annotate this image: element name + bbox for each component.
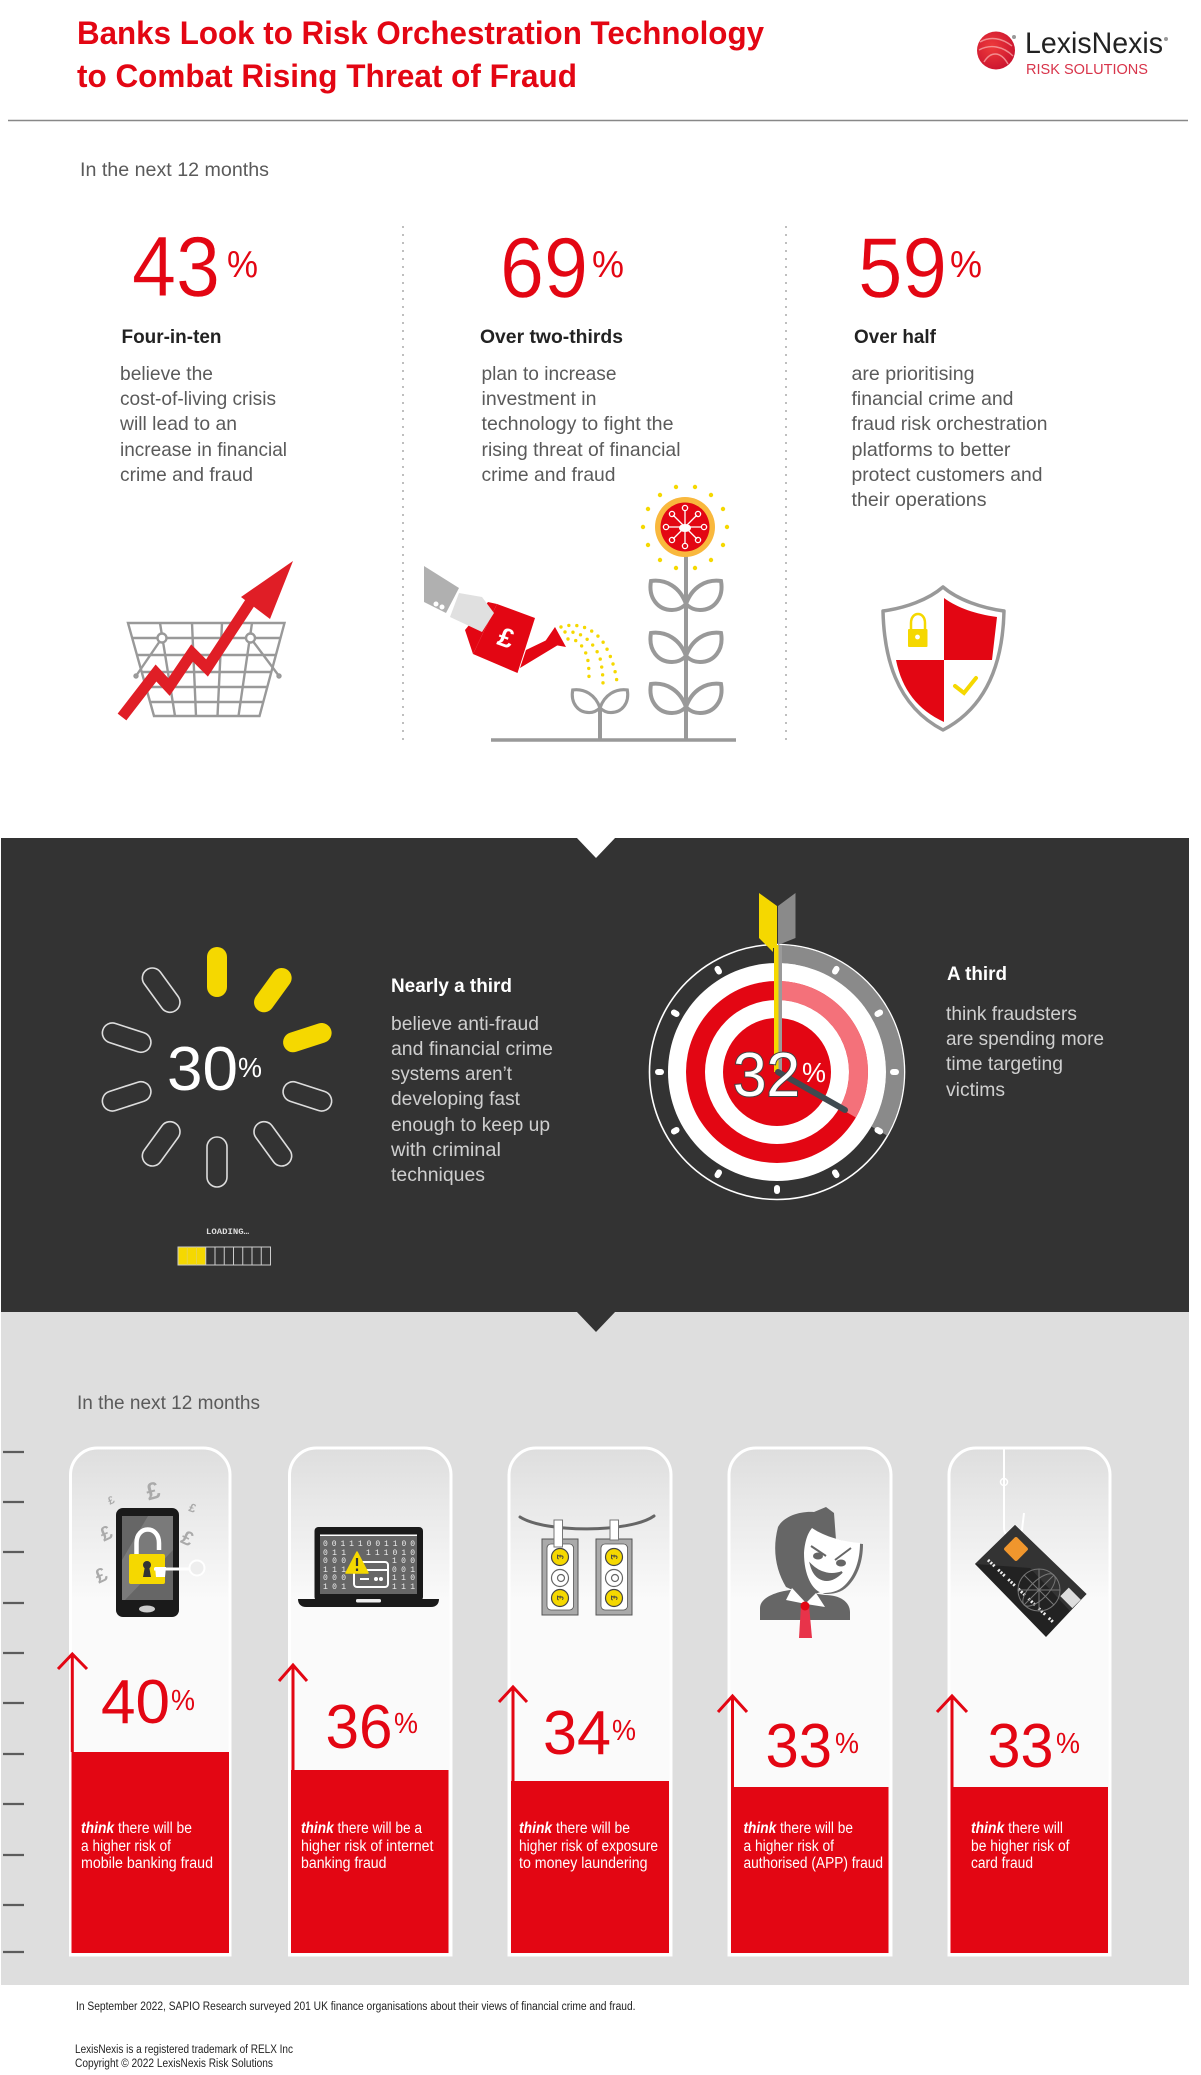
icon: hand with watering can and flower: £ (494, 621, 518, 655)
icon: phone with padlock and key (92, 1477, 204, 1617)
footnote: copyright: LexisNexis is a registered trademark of RELX Inc (75, 2044, 293, 2056)
text block: nearly a third: developing fast (391, 1088, 521, 1110)
icon: credit card on fishing hook (975, 1447, 1086, 1637)
panel: mobile banking fraud: % (171, 1685, 195, 1717)
icon: phone with padlock and key: £ (177, 1527, 197, 1551)
panel: money laundering: % (612, 1715, 636, 1747)
icon: hand with watering can and flower (424, 485, 736, 740)
panel: 69 percent: investment in (482, 388, 596, 410)
footnote: copyright: Copyright © 2022 LexisNexis Risk Solutions (75, 2058, 273, 2070)
text block: a third: A third (947, 963, 1007, 985)
icon: phone with padlock and key: £ (97, 1522, 116, 1546)
panel: card fraud: 33 (988, 1712, 1054, 1781)
panel: 59 percent: are prioritising (852, 363, 974, 385)
icon: man with mask (760, 1507, 863, 1638)
icon: laptop with warning and card: 1 0 0 (392, 1557, 415, 1566)
panel: authorised APP fraud: a higher risk of (744, 1838, 835, 1855)
panel: mobile banking fraud: 40 (101, 1668, 170, 1737)
panel: authorised APP fraud: think there will be (744, 1820, 853, 1837)
panel: 43 percent: Four-in-ten (122, 326, 222, 348)
icon: laptop with warning and card: 1 1 1 0 1 0 (366, 1549, 415, 1558)
title (77, 15, 764, 94)
icon: banknotes on washing line: £ (609, 1595, 619, 1601)
icon: laptop with warning and card: 1 0 1 (323, 1583, 346, 1592)
icon: phone with padlock and key: £ (106, 1494, 117, 1508)
chart: 32 percent dartboard clock: % (802, 1057, 826, 1088)
text block: nearly a third: believe anti-fraud (391, 1013, 539, 1035)
panel: 59 percent: financial crime and (852, 388, 1014, 410)
panel: 69 percent: 69 (500, 221, 588, 316)
text block: nearly a third: techniques (391, 1164, 485, 1186)
panel: 43 percent: believe the (120, 363, 213, 385)
panel: 69 percent: rising threat of financial (482, 439, 680, 461)
icon: laptop with warning and card: 0 0 0 (323, 1574, 346, 1583)
panel: 43 percent: 43 (132, 220, 220, 315)
icon: shopping basket with rising arrow (122, 561, 293, 717)
panel: 69 percent: % (592, 244, 624, 286)
panel: 43 percent (119, 220, 287, 486)
panel: 43 percent: % (227, 244, 258, 286)
icon: phone with padlock and key: £ (143, 1477, 164, 1506)
panel: card fraud: card fraud (971, 1855, 1033, 1872)
text block: nearly a third (390, 975, 553, 1186)
chart: 32 percent dartboard clock: 32 (733, 1041, 800, 1110)
icon: banknotes on washing line (520, 1516, 654, 1615)
logo: LexisNexis Risk Solutions (977, 27, 1168, 78)
icon: laptop with warning and card: 0 0 0 (323, 1557, 346, 1566)
panel: card fraud: think there will (971, 1820, 1063, 1837)
icon: phone with padlock and key: £ (187, 1500, 198, 1516)
footnote: copyright (75, 2044, 293, 2070)
logo: LexisNexis Risk Solutions: LexisNexis (1025, 27, 1163, 60)
panel: 69 percent: technology to fight the (482, 413, 674, 435)
panel: 69 percent: plan to increase (482, 363, 616, 385)
panel: mobile banking fraud: mobile banking fraud (81, 1855, 213, 1872)
panel: 43 percent: increase in financial (120, 439, 287, 461)
icon: banknotes on washing line: £ (555, 1595, 565, 1601)
panel: mobile banking fraud (58, 1448, 230, 1955)
panel: internet banking fraud: banking fraud (301, 1855, 386, 1872)
panel: 59 percent: platforms to better (852, 439, 1011, 461)
panel: money laundering: to money laundering (519, 1855, 648, 1872)
text block: a third (946, 963, 1104, 1101)
panel: card fraud: be higher risk of (971, 1838, 1070, 1855)
panel: 59 percent: fraud risk orchestration (852, 413, 1048, 435)
panel: dark section background (1, 838, 1189, 1312)
progress bar: loading (178, 1228, 270, 1265)
section heading: in the next 12 months: In the next 12 months (77, 1392, 260, 1414)
section heading: in the next 12 months: In the next 12 months (80, 159, 269, 181)
text block: nearly a third: and financial crime (391, 1038, 553, 1060)
panel: 43 percent: will lead to an (119, 413, 237, 435)
panel: internet banking fraud: 36 (326, 1693, 392, 1762)
icon: laptop with warning and card: 1 1 0 (392, 1574, 415, 1583)
panel: 59 percent: their operations (852, 489, 987, 511)
icon: laptop with warning and card: 0 0 1 (392, 1566, 415, 1575)
panel: 59 percent (852, 221, 1048, 511)
progress bar: loading: LOADING… (206, 1228, 249, 1237)
panel: 59 percent: Over half (854, 326, 936, 348)
icon: banknotes on washing line: £ (609, 1554, 619, 1560)
panel: grey risk section background (1, 1312, 1189, 1985)
panel: money laundering: 34 (543, 1699, 611, 1768)
chart: 30 percent loading spinner: % (238, 1052, 262, 1083)
text block: a third: victims (946, 1079, 1005, 1101)
panel: mobile banking fraud: a higher risk of (81, 1838, 172, 1855)
panel: authorised APP fraud: 33 (766, 1712, 832, 1781)
logo: LexisNexis Risk Solutions: RISK SOLUTIONS (1026, 62, 1148, 78)
chart: 32 percent dartboard clock (650, 893, 904, 1200)
icon: laptop with warning and card: 1 1 1 (323, 1566, 346, 1575)
panel: 59 percent: protect customers and (852, 464, 1042, 486)
panel: internet banking fraud: think there will be a (301, 1820, 422, 1837)
panel: card fraud: % (1056, 1728, 1080, 1760)
notch: top of dark panel (576, 837, 616, 858)
icon: phone with padlock and key: £ (92, 1564, 111, 1588)
panel: 43 percent: cost-of-living crisis (120, 388, 276, 410)
panel: 69 percent: crime and fraud (482, 464, 616, 486)
icon: banknotes on washing line: £ (555, 1554, 565, 1560)
icon: shield (883, 587, 1004, 730)
panel: authorised APP fraud (718, 1448, 891, 1955)
chart: 30 percent loading spinner (100, 947, 334, 1187)
text block: nearly a third: Nearly a third (391, 975, 512, 997)
chart: 30 percent loading spinner: 30 (167, 1035, 238, 1104)
text block: nearly a third: with criminal (390, 1139, 501, 1161)
panel: card fraud (937, 1447, 1110, 1955)
text block: a third: time targeting (946, 1053, 1063, 1075)
text block: nearly a third: enough to keep up (391, 1114, 550, 1136)
icon: laptop with warning and card: 0 0 1 1 1 0 0 1 1 0 0 (323, 1540, 415, 1549)
panel: internet banking fraud: higher risk of internet (301, 1838, 434, 1855)
title: to Combat Rising Threat of Fraud (77, 58, 577, 94)
text block: a third: think fraudsters (946, 1003, 1077, 1025)
panel: internet banking fraud (279, 1448, 451, 1955)
panel: money laundering: think there will be (519, 1820, 630, 1837)
icon: laptop with warning and card (298, 1527, 439, 1607)
panel: authorised APP fraud: authorised (APP) fraud (744, 1855, 883, 1872)
panel: 69 percent (480, 221, 680, 486)
icon: laptop with warning and card: 0 1 1 (323, 1549, 346, 1558)
panel: 59 percent: % (950, 244, 982, 286)
panel: money laundering: higher risk of exposure (519, 1838, 658, 1855)
panel: 69 percent: Over two-thirds (480, 326, 623, 348)
panel: 43 percent: crime and fraud (120, 464, 253, 486)
text block: a third: are spending more (946, 1028, 1104, 1050)
panel: internet banking fraud: % (394, 1708, 418, 1740)
icon: laptop with warning and card: 1 1 1 (392, 1583, 415, 1592)
panel: 59 percent: 59 (858, 221, 947, 316)
panel: mobile banking fraud: think there will be (81, 1820, 192, 1837)
panel: money laundering (499, 1448, 671, 1955)
notch: bottom of dark panel (576, 1311, 616, 1332)
footnote: survey: In September 2022, SAPIO Research surveyed 201 UK finance organisations about their views of financial crime and fraud. (76, 2001, 636, 2013)
panel: authorised APP fraud: % (835, 1728, 859, 1760)
title: Banks Look to Risk Orchestration Technology (77, 15, 764, 51)
text block: nearly a third: systems aren’t (391, 1063, 513, 1085)
